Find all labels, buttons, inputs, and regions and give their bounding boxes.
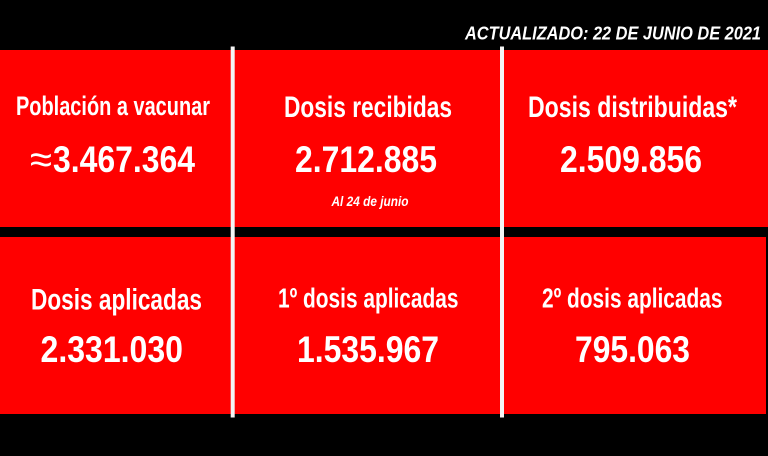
label: dosis recibidas: Dosis recibidas [284,91,452,124]
label: primera dosis aplicadas: 1º dosis aplicadas [278,282,458,314]
value: dosis distribuidas: 2.509.856 [560,139,702,180]
label: población a vacunar: Población a vacunar [16,91,210,121]
value: dosis aplicadas: 2.331.030 [40,329,183,370]
value: población a vacunar: ≈ [30,138,52,182]
panel: dosis distribuidas [501,50,768,227]
value: primera dosis aplicadas: 1.535.967 [297,329,439,370]
value: segunda dosis aplicadas: 795.063 [575,329,690,370]
panel: segunda dosis aplicadas [501,237,766,414]
panel: primera dosis aplicadas [231,237,501,414]
panel: población a vacunar [0,50,231,227]
panel: dosis aplicadas [0,237,231,414]
value: población a vacunar: 3.467.364 [53,139,195,180]
note: fecha de dosis recibidas: Al 24 de junio [331,193,409,209]
value: dosis recibidas: 2.712.885 [295,139,437,180]
panel: dosis recibidas [231,50,501,227]
label: dosis aplicadas: Dosis aplicadas [31,284,202,316]
